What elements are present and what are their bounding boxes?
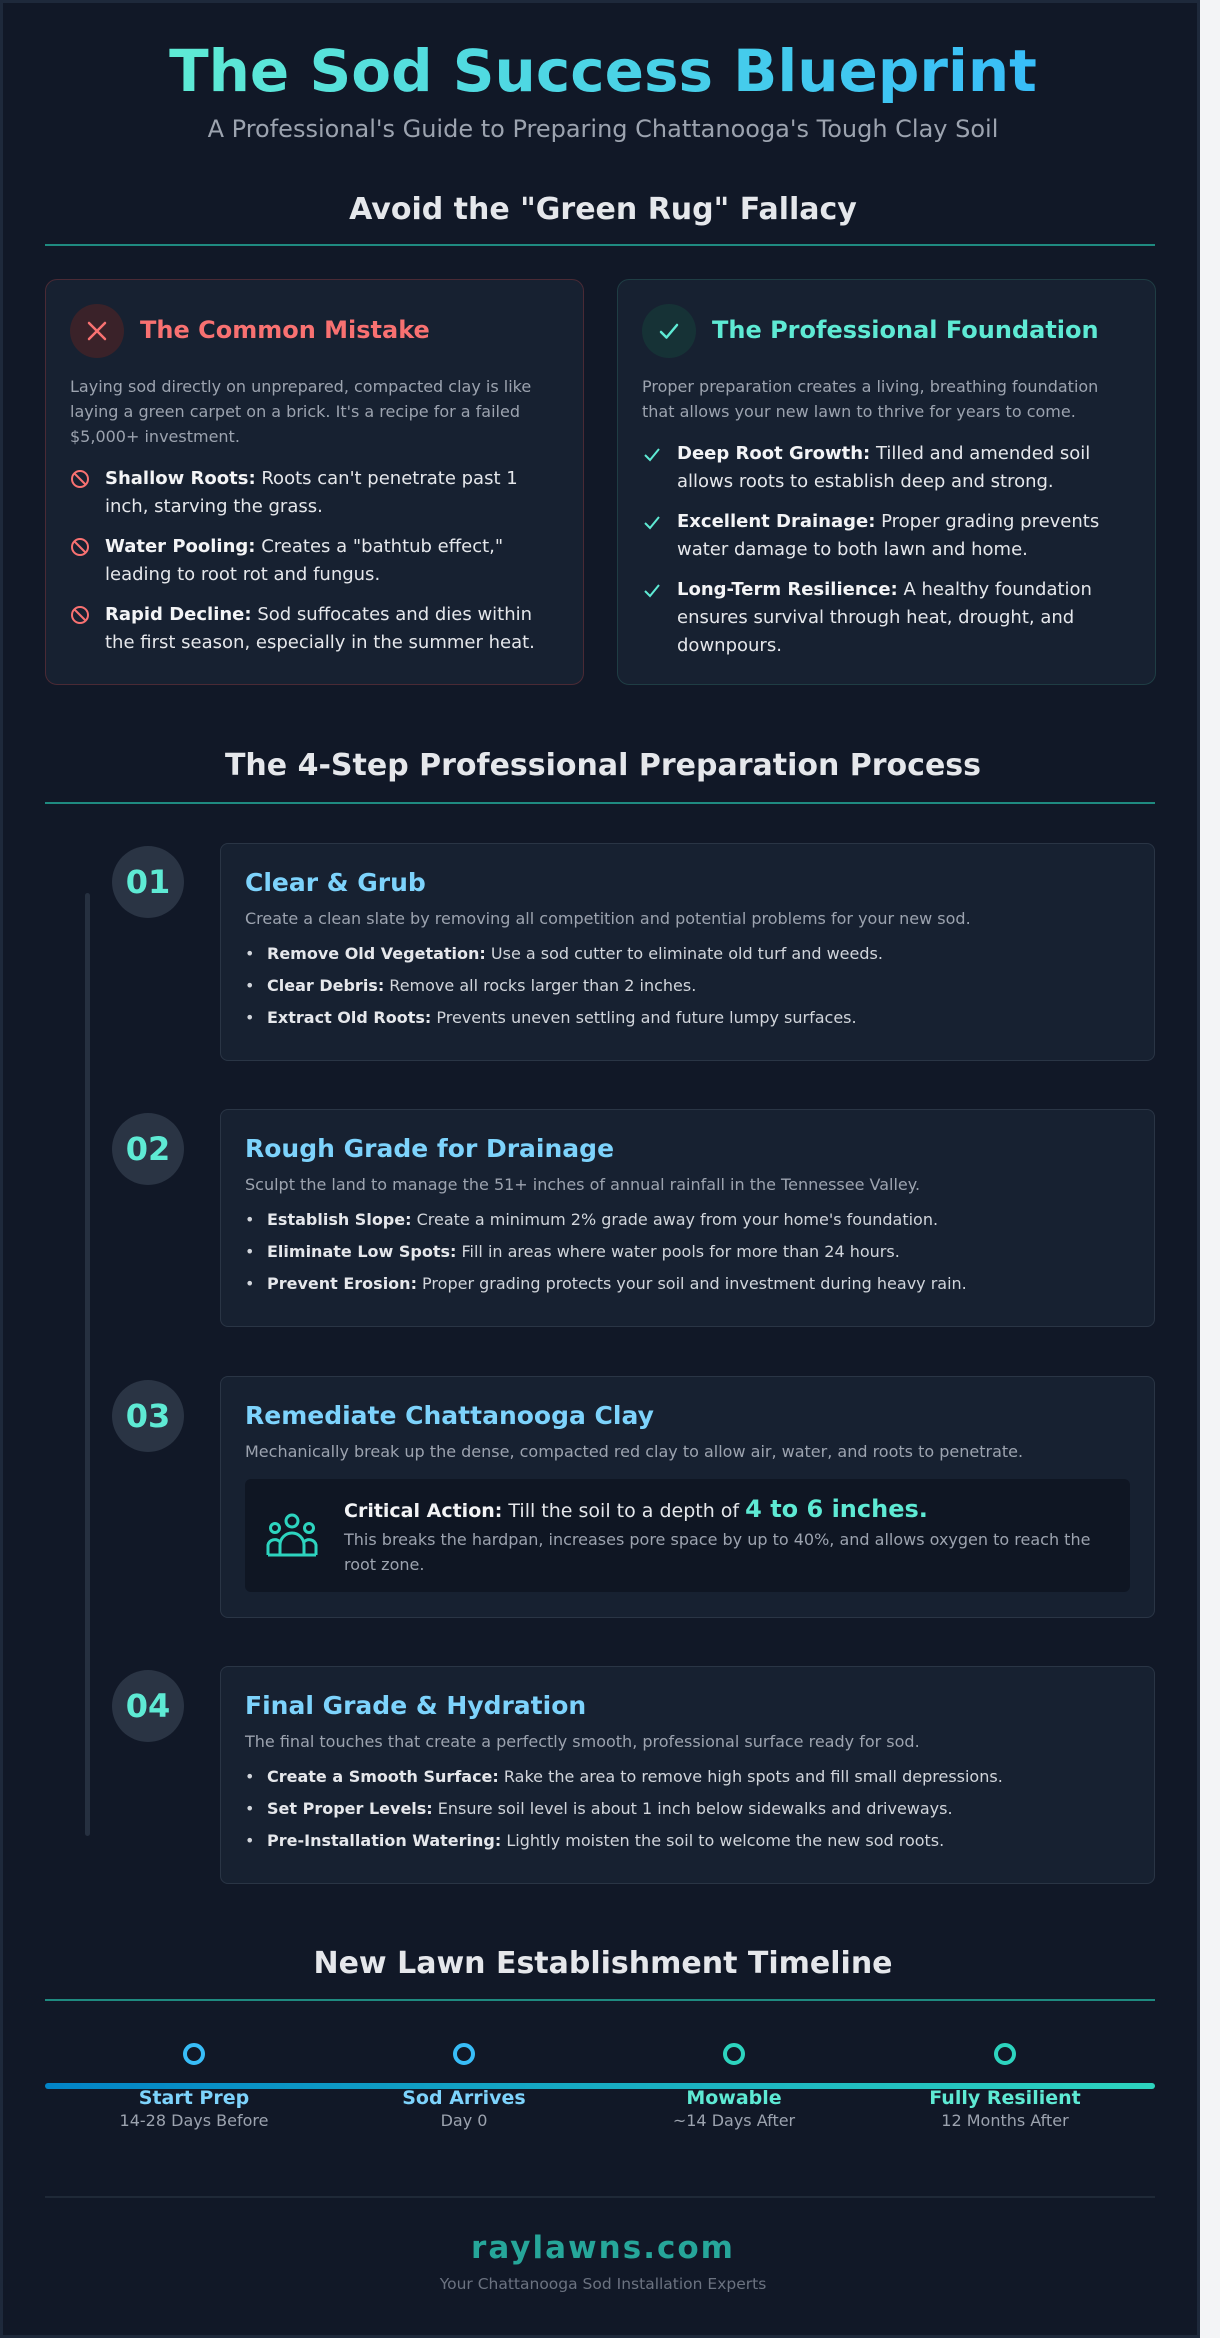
milestone: sod arrives [402,2043,526,2130]
heading: timeline: New Lawn Establishment Timeline [313,1946,893,1981]
footer brand: raylawns.com [471,2230,735,2266]
milestone: mowable: Mowable [686,2087,782,2109]
step 02 number [112,1113,184,1185]
milestone: fully resilient: 12 Months After [941,2111,1069,2130]
card title: The Professional Foundation [712,316,1099,344]
step 04 card: Final Grade & Hydration [245,1691,586,1720]
step 01 card: Create a clean slate by removing all competition and potential problems for your new sod. [245,909,971,928]
step 01 card: Remove Old Vegetation: Use a sod cutter to eliminate old turf and weeds. [267,944,883,963]
panel: common mistake [45,279,584,685]
callout: critical action: This breaks the hardpan, increases pore space by up to 40%, and allows oxygen to reach the root zone. [344,1530,1090,1574]
milestone: fully resilient: Fully Resilient [929,2087,1081,2109]
list: Deep Root Growth: Tilled and amended soil allows roots to establish deep and strong. [677,443,1090,492]
list [71,468,535,653]
list: Water Pooling: Creates a "bathtub effect," leading to root rot and fungus. [105,536,503,585]
step 02 card [220,1109,1155,1327]
step 01 number [112,846,184,918]
step 04 card: Pre-Installation Watering: Lightly moisten the soil to welcome the new sod roots. [267,1831,944,1850]
step 02 card: Sculpt the land to manage the 51+ inches of annual rainfall in the Tennessee Valley. [245,1175,920,1194]
milestone: fully resilient [929,2043,1081,2130]
step 02 number: 02 [126,1130,170,1168]
timeline bar [45,2083,1155,2089]
list: Excellent Drainage: Proper grading prevents water damage to both lawn and home. [677,511,1099,560]
step 03 card [220,1376,1155,1618]
step 02 card: Rough Grade for Drainage [245,1134,614,1163]
panel: professional foundation [617,279,1156,685]
step 01 card: Clear Debris: Remove all rocks larger than 2 inches. [267,976,696,995]
step 01 card: Extract Old Roots: Prevents uneven settling and future lumpy surfaces. [267,1008,857,1027]
step 01 card: Clear & Grub [245,868,426,897]
list [644,443,1099,656]
subtitle: A Professional's Guide to Preparing Chattanooga's Tough Clay Soil [208,115,998,143]
milestone: start prep [120,2043,268,2130]
icon: group [266,1514,318,1556]
milestone: start prep: Start Prep [139,2087,249,2109]
milestone: mowable: ~14 Days After [673,2111,795,2130]
step 04 card: Set Proper Levels: Ensure soil level is about 1 inch below sidewalks and driveways. [267,1799,953,1818]
milestone: mowable [673,2043,796,2130]
milestone: start prep: 14-28 Days Before [120,2111,268,2130]
milestone: sod arrives: Day 0 [441,2111,487,2130]
step 03 card: Remediate Chattanooga Clay [245,1401,654,1430]
title: The Sod Success Blueprint [169,37,1037,105]
step 04 card: Create a Smooth Surface: Rake the area to remove high spots and fill small depressions. [267,1767,1003,1786]
step 01 number: 01 [126,863,170,901]
step 02 card: Establish Slope: Create a minimum 2% grade away from your home's foundation. [267,1210,938,1229]
step 04 card: The final touches that create a perfectly smooth, professional surface ready for sod. [245,1732,920,1751]
heading: green rug fallacy: Avoid the "Green Rug" Fallacy [349,192,857,227]
step 04 card [220,1666,1155,1884]
callout: critical action [245,1479,1130,1592]
description: Proper preparation creates a living, breathing foundation that allows your new lawn to thrive for years to come. [642,377,1098,421]
step 03 card: Mechanically break up the dense, compacted red clay to allow air, water, and roots to penetrate. [245,1442,1023,1461]
timeline vertical line [85,893,90,1836]
step 03 number [112,1380,184,1452]
step 02 card: Prevent Erosion: Proper grading protects your soil and investment during heavy rain. [267,1274,967,1293]
step 02 card: Eliminate Low Spots: Fill in areas where water pools for more than 24 hours. [267,1242,900,1261]
list: Long-Term Resilience: A healthy foundation ensures survival through heat, drought, and downpours. [677,579,1092,656]
step 01 card [220,843,1155,1061]
list: Shallow Roots: Roots can't penetrate past 1 inch, starving the grass. [105,468,518,517]
description: Laying sod directly on unprepared, compacted clay is like laying a green carpet on a brick. It's a recipe for a failed $5,000+ investment. [70,377,531,446]
milestone: sod arrives: Sod Arrives [402,2087,526,2109]
list: Rapid Decline: Sod suffocates and dies within the first season, especially in the summer heat. [105,604,535,653]
step 04 number [112,1670,184,1742]
card title: The Common Mistake [140,316,430,344]
footer tagline: Your Chattanooga Sod Installation Experts [440,2275,766,2293]
heading: process: The 4-Step Professional Preparation Process [225,748,981,783]
step 03 number: 03 [126,1397,170,1435]
icon: check [642,304,696,358]
callout: critical action: Critical Action: Till the soil to a depth of 4 to 6 inches. [344,1495,928,1523]
step 04 number: 04 [126,1687,170,1725]
icon: x [70,304,124,358]
